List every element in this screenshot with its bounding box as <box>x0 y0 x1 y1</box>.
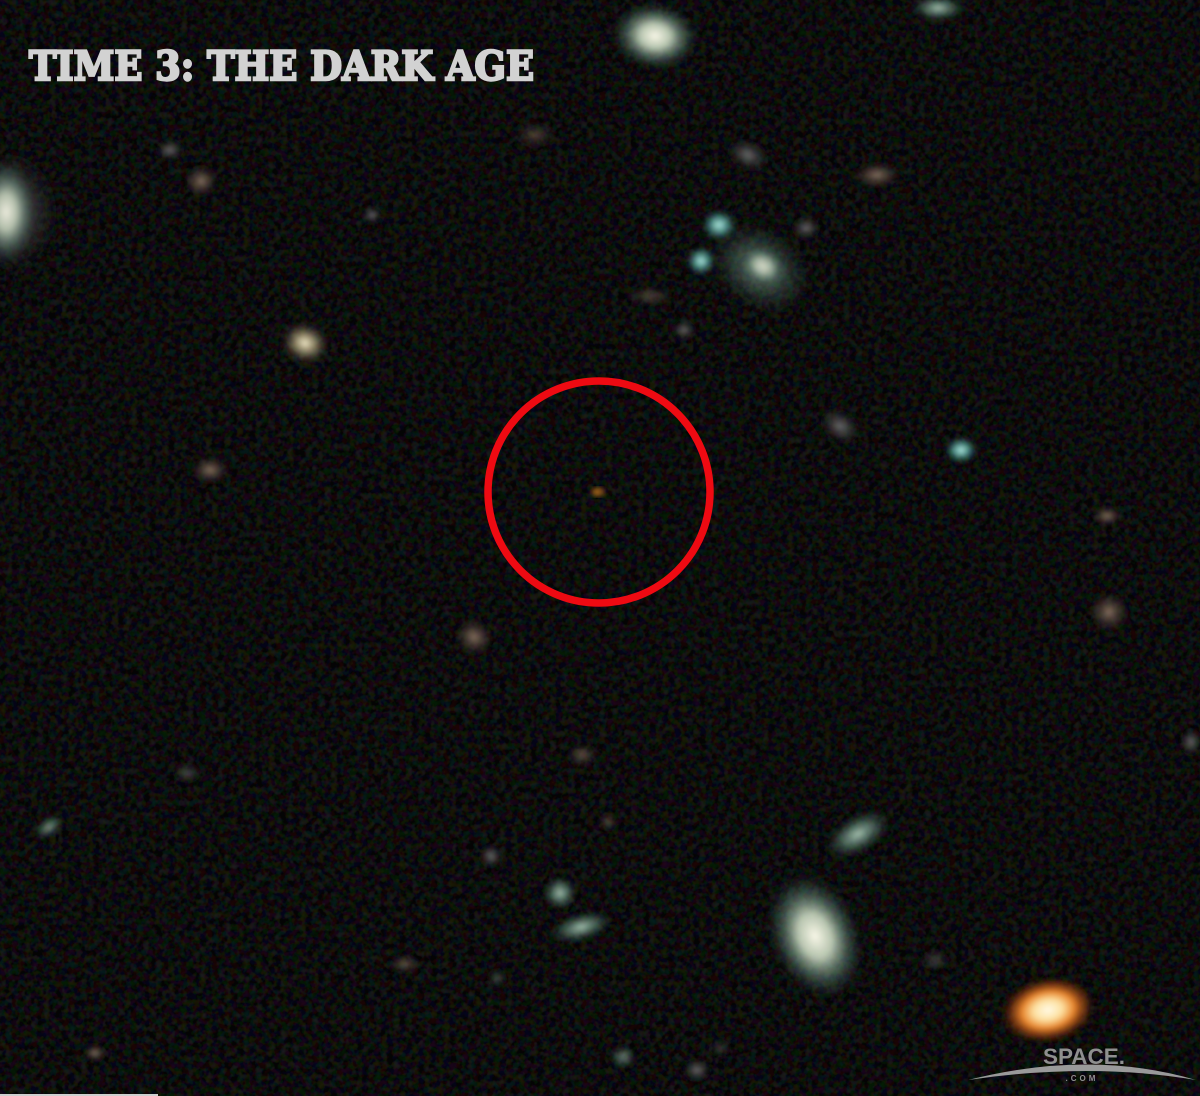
bottom edge strip <box>0 1094 158 1096</box>
logo: Space.com <box>968 1044 1196 1083</box>
galaxy: left edge <box>0 150 60 274</box>
galaxy: lower pair <box>543 800 899 949</box>
galaxy: small bright left <box>274 315 336 371</box>
target galaxy: faint orange dot <box>591 487 605 497</box>
galaxy: top centre <box>607 0 703 76</box>
title: TIME 3: THE DARK AGE <box>29 43 534 90</box>
logo: Space.com: .COM <box>1066 1074 1098 1083</box>
galaxy: orange bright <box>995 969 1101 1051</box>
red circle marker <box>488 381 710 603</box>
galaxy: large bright lower right <box>748 858 882 1014</box>
galaxy: upper centre-right cluster <box>686 132 830 335</box>
galaxy: teal point right <box>944 436 978 464</box>
galaxy: top right <box>911 0 965 21</box>
logo: Space.com: SPACE. <box>1043 1044 1125 1069</box>
